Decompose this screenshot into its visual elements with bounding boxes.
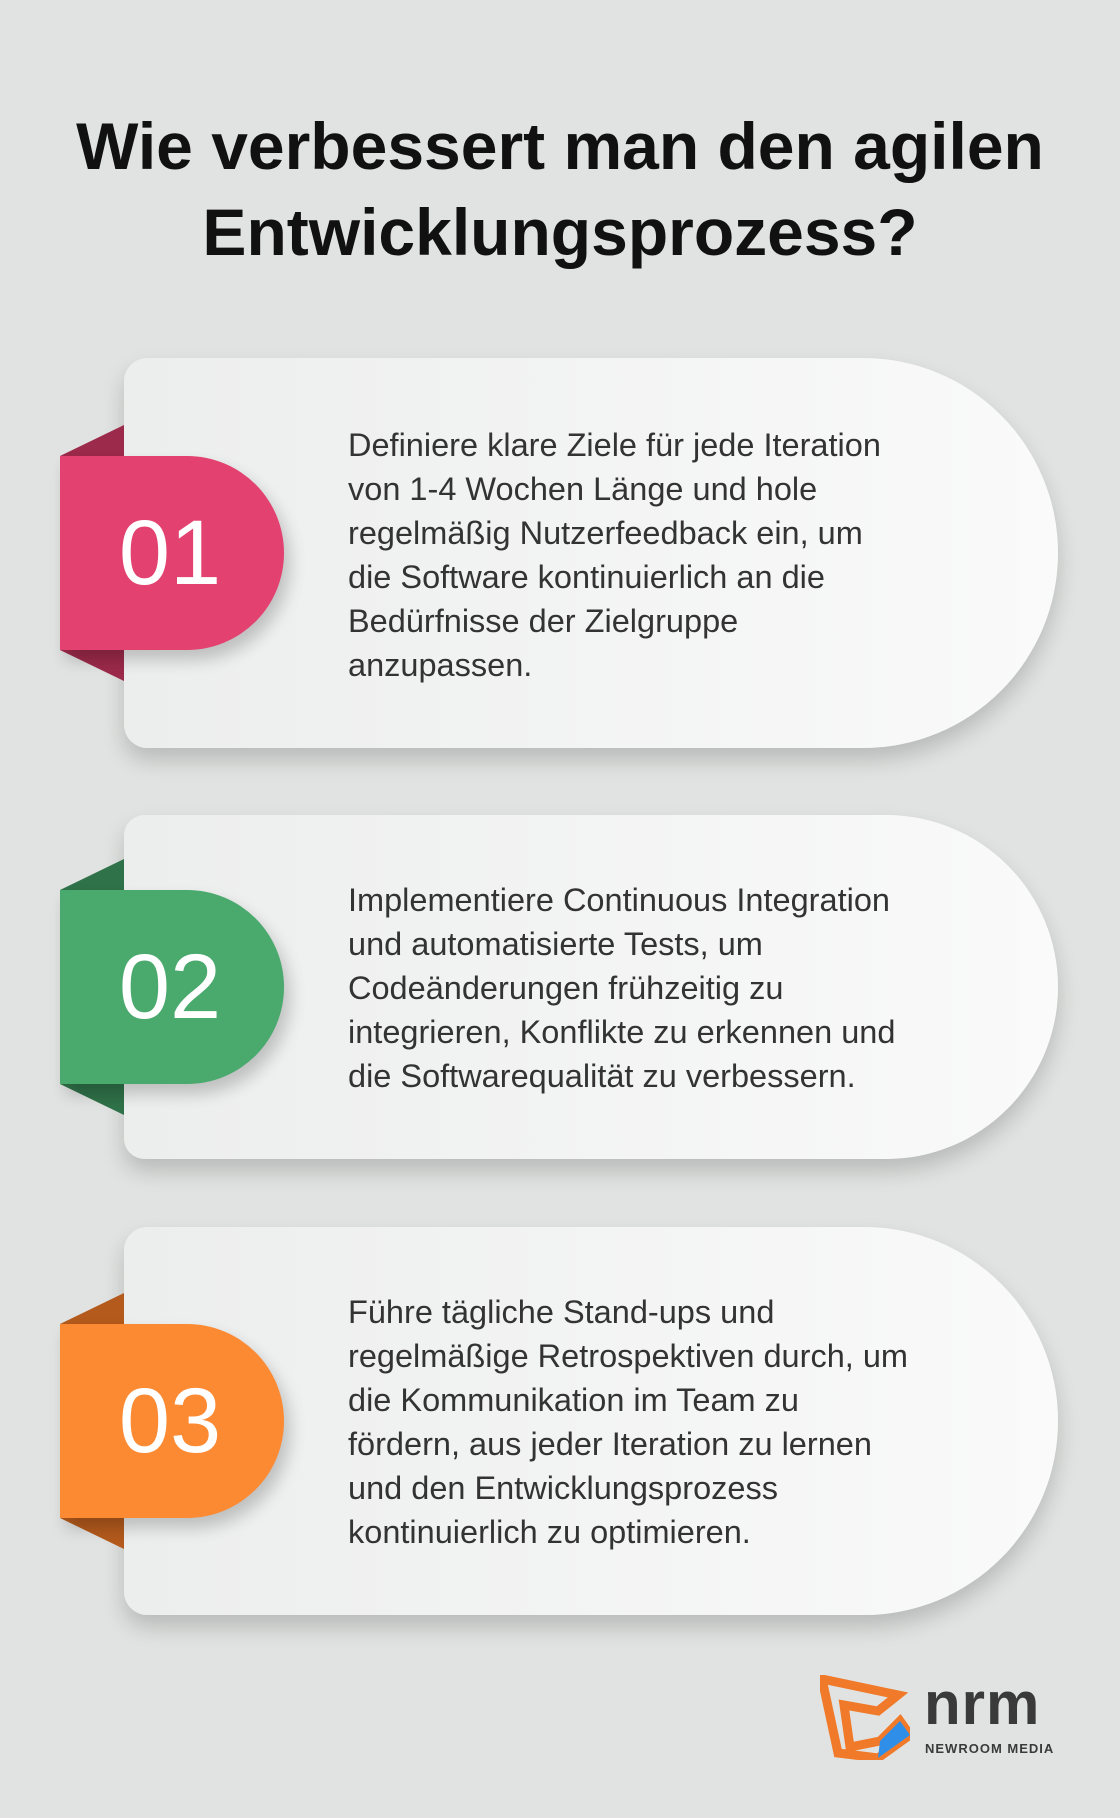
text 1: die Software kontinuierlich an die xyxy=(348,559,825,595)
text 1: regelmäßig Nutzerfeedback ein, um xyxy=(348,515,863,551)
text 2: die Softwarequalität zu verbessern. xyxy=(348,1058,856,1094)
text 2: Codeänderungen frühzeitig zu xyxy=(348,970,783,1006)
card 3 xyxy=(124,1227,1058,1615)
fold 3 xyxy=(60,1293,124,1549)
text 2 xyxy=(348,882,895,1094)
card 2 xyxy=(124,815,1058,1159)
text 3: regelmäßige Retrospektiven durch, um xyxy=(348,1338,908,1374)
text 1: Bedürfnisse der Zielgruppe xyxy=(348,603,738,639)
text 2: Implementiere Continuous Integration xyxy=(348,882,890,918)
badge 03 xyxy=(60,1324,284,1518)
text 3: und den Entwicklungsprozess xyxy=(348,1470,778,1506)
badge 02 xyxy=(60,890,284,1084)
title xyxy=(76,109,1044,269)
title: Entwicklungsprozess? xyxy=(202,195,918,269)
text 1 xyxy=(348,427,881,683)
badge 01 xyxy=(60,456,284,650)
title: Wie verbessert man den agilen xyxy=(76,109,1044,183)
text 1: von 1-4 Wochen Länge und hole xyxy=(348,471,817,507)
logo xyxy=(820,1670,1054,1760)
text 3: fördern, aus jeder Iteration zu lernen xyxy=(348,1426,872,1462)
text 2: integrieren, Konflikte zu erkennen und xyxy=(348,1014,895,1050)
logo: nrm xyxy=(924,1670,1040,1737)
text 2: und automatisierte Tests, um xyxy=(348,926,763,962)
fold 1 xyxy=(60,425,124,681)
text 3: kontinuierlich zu optimieren. xyxy=(348,1514,751,1550)
card 1 xyxy=(124,358,1058,748)
badge 03: 03 xyxy=(119,1370,221,1472)
badge 02: 02 xyxy=(119,936,221,1038)
badge 01: 01 xyxy=(119,502,221,604)
logo: NEWROOM MEDIA xyxy=(925,1741,1054,1756)
text 3: die Kommunikation im Team zu xyxy=(348,1382,799,1418)
fold 2 xyxy=(60,859,124,1115)
text 3: Führe tägliche Stand-ups und xyxy=(348,1294,774,1330)
text 1: Definiere klare Ziele für jede Iteration xyxy=(348,427,881,463)
text 1: anzupassen. xyxy=(348,647,532,683)
text 3 xyxy=(348,1294,908,1550)
